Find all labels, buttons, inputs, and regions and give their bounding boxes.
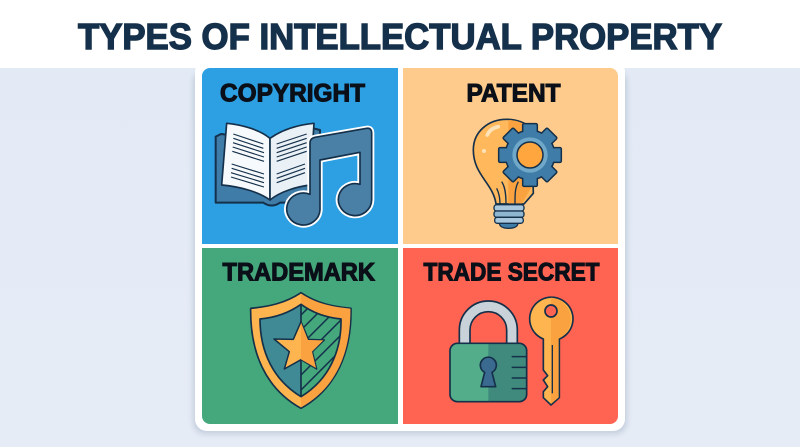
title: TYPES OF INTELLECTUAL PROPERTY	[78, 16, 722, 57]
icon: key	[530, 297, 573, 405]
heading: trade secret: TRADE SECRET	[424, 258, 600, 286]
heading: patent: PATENT	[466, 80, 560, 108]
panel: trade secret	[403, 248, 618, 424]
icon: padlock	[450, 301, 527, 402]
panel: trademark	[202, 248, 398, 424]
card shadow	[193, 70, 627, 434]
card	[195, 60, 625, 431]
heading: copyright: COPYRIGHT	[220, 80, 365, 108]
header band	[0, 0, 800, 68]
heading: trademark: TRADEMARK	[222, 258, 375, 286]
panel: patent	[403, 68, 618, 244]
icon: book and music note	[216, 123, 372, 225]
icon: light bulb and gear	[473, 119, 561, 228]
icon: shield with star	[251, 293, 351, 408]
panel: copyright	[202, 68, 398, 244]
